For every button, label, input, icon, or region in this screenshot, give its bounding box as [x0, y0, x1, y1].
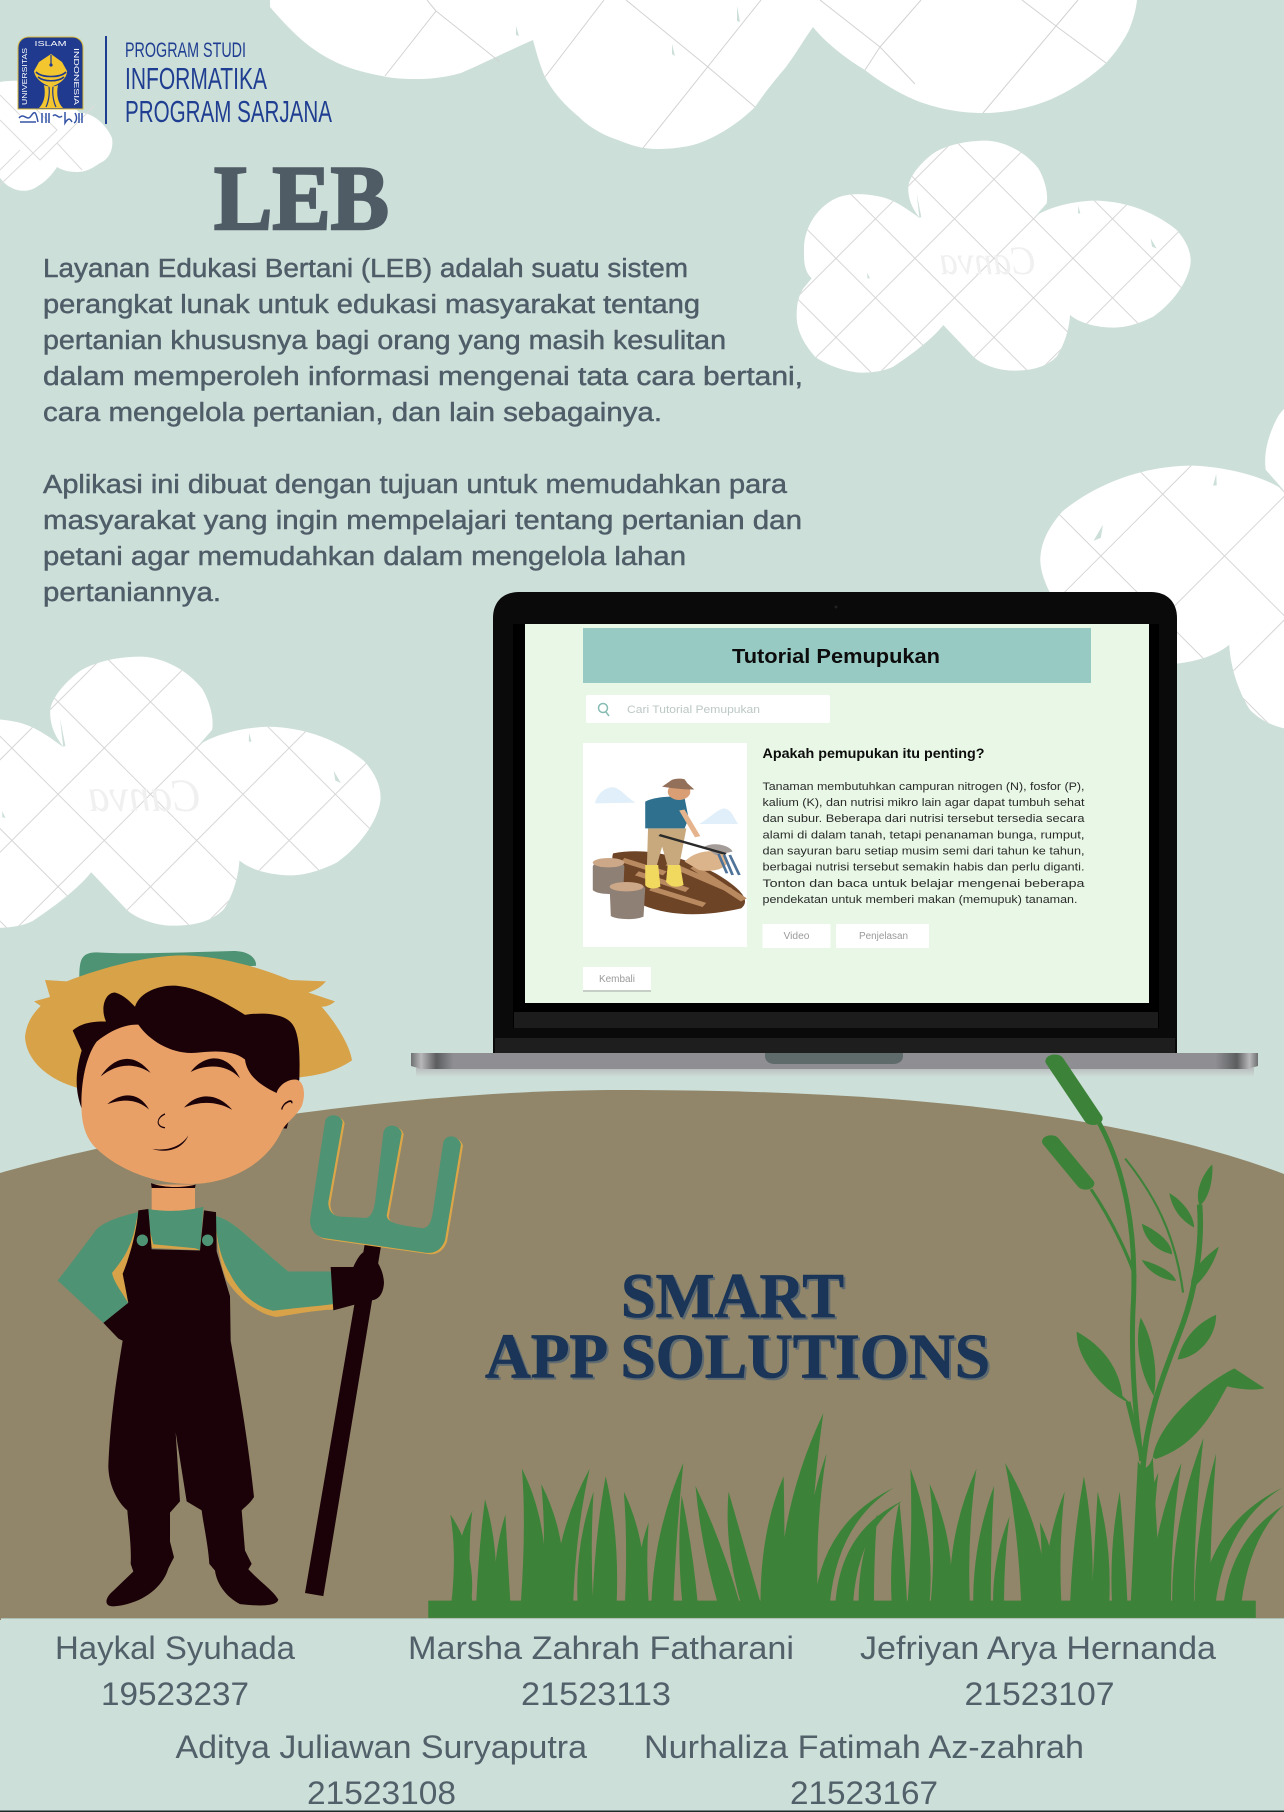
- description paragraph 2: pertaniannya.: [43, 579, 221, 607]
- logo text: PROGRAM SARJANA: [125, 94, 332, 129]
- grass: [428, 1413, 1284, 1618]
- article text: dan subur. Beberapa dari nutrisi tersebut tersedia secara: [762, 813, 1086, 825]
- screen: [525, 624, 1149, 1003]
- search box: [586, 695, 830, 723]
- watermark: Canva: [939, 238, 1036, 283]
- article text: pendekatan untuk memberi makan (memupuk) tanaman.: [762, 894, 1078, 906]
- laptop body: [493, 592, 1177, 1053]
- logo text: INFORMATIKA: [125, 61, 267, 96]
- icon: shield: [18, 37, 83, 109]
- search box: Cari Tutorial Pemupukan: [627, 704, 760, 716]
- icon: shield: INDONESIA: [72, 48, 79, 105]
- ground hill: [0, 1090, 1284, 1620]
- member: Haykal Syuhada: Haykal Syuhada: [55, 1630, 296, 1666]
- button: video: Video: [784, 931, 810, 942]
- description paragraph 1: dalam memperoleh informasi mengenai tata cara bertani,: [43, 363, 803, 391]
- member: Jefriyan Arya Hernanda: [860, 1630, 1217, 1712]
- neck shadow: [151, 1183, 196, 1188]
- description paragraph 2: petani agar memudahkan dalam mengelola lahan: [43, 543, 686, 571]
- glove: [331, 1251, 384, 1310]
- laptop base: [411, 1053, 1258, 1069]
- icon: shield: ISLAM: [34, 41, 67, 48]
- laptop base shadow: [416, 1068, 1254, 1077]
- button: kembali: Kembali: [599, 974, 635, 985]
- description paragraph 1: [43, 255, 803, 427]
- neck: [152, 1184, 195, 1213]
- laptop: [411, 592, 1258, 1077]
- member: Nurhaliza Fatimah Az-zahrah: Nurhaliza Fatimah Az-zahrah: [644, 1729, 1084, 1765]
- button: penjelasan: Penjelasan: [859, 931, 908, 942]
- face: [81, 1025, 304, 1184]
- divider: [105, 36, 107, 124]
- app header: [583, 628, 1091, 683]
- university logo: [18, 36, 332, 129]
- smart app solutions heading: APP SOLUTIONS: [485, 1320, 990, 1392]
- member: Marsha Zahrah Fatharani: Marsha Zahrah Fatharani: [408, 1630, 794, 1666]
- article text: berbagai nutrisi tersebut semakin habis dan perlu diganti.: [762, 862, 1084, 874]
- member: Haykal Syuhada: [55, 1630, 296, 1712]
- description paragraph 1: cara mengelola pertanian, dan lain sebagainya.: [43, 399, 662, 427]
- article text: [762, 781, 1086, 906]
- smart app solutions heading: SMART: [621, 1260, 844, 1331]
- article text: dan sayuran baru setiap musim semi dari tahun ke tahun,: [762, 846, 1084, 858]
- button: penjelasan: [836, 924, 929, 948]
- icon: calligraphy strip: [19, 112, 82, 123]
- member: Aditya Juliawan Suryaputra: Aditya Juliawan Suryaputra: [176, 1729, 588, 1765]
- smart app solutions heading: [485, 1260, 990, 1392]
- article text: Tonton dan baca untuk belajar mengenai beberapa: [762, 878, 1086, 890]
- member: Marsha Zahrah Fatharani: 21523113: [521, 1676, 671, 1712]
- member: Haykal Syuhada: 19523237: [101, 1676, 249, 1712]
- button: kembali: [583, 967, 651, 992]
- pitchfork: [305, 1115, 463, 1596]
- plant and grass: [428, 1061, 1284, 1618]
- title: LEB: LEB: [214, 147, 389, 249]
- description paragraph 1: Layanan Edukasi Bertani (LEB) adalah suatu sistem: [43, 255, 688, 283]
- team names band: [0, 1618, 1284, 1812]
- member: Marsha Zahrah Fatharani: [408, 1630, 794, 1712]
- icon: reed plant: [1051, 1061, 1265, 1603]
- description paragraph 2: masyarakat yang ingin mempelajari tentang pertanian dan: [43, 507, 802, 535]
- facial features: [101, 1058, 292, 1151]
- description paragraph 2: [43, 471, 802, 607]
- member: Nurhaliza Fatimah Az-zahrah: 21523167: [790, 1775, 938, 1811]
- article text: alami di dalam tanah, tetapi penanaman bunga, rumput,: [762, 830, 1084, 842]
- description paragraph 1: perangkat lunak untuk edukasi masyarakat tentang: [43, 291, 700, 319]
- member: Aditya Juliawan Suryaputra: [176, 1729, 588, 1811]
- description paragraph 1: pertanian khususnya bagi orang yang masih kesulitan: [43, 327, 726, 355]
- cloud: upper right: [747, 0, 1247, 901]
- overall buttons: [137, 1234, 213, 1246]
- watermark: Canva: [88, 770, 201, 822]
- icon: shield: UNIVERSITAS: [22, 48, 29, 105]
- logo text: [125, 39, 332, 129]
- hat brim: [25, 955, 352, 1088]
- shirt: [58, 1207, 333, 1323]
- farmer illustration panel: [583, 743, 747, 947]
- hair: [73, 986, 300, 1129]
- article text: Tanaman membutuhkan campuran nitrogen (N), fosfor (P),: [762, 781, 1084, 793]
- logo text: PROGRAM STUDI: [125, 39, 246, 62]
- button: video: [762, 924, 830, 948]
- farmer character: [25, 951, 463, 1606]
- description paragraph 2: Aplikasi ini dibuat dengan tujuan untuk memudahkan para: [43, 471, 788, 499]
- farmer illustration: [593, 779, 745, 919]
- article text: kalium (K), dan nutrisi mikro lain agar dapat tumbuh sehat: [762, 797, 1084, 809]
- member: Jefriyan Arya Hernanda: 21523107: [964, 1676, 1114, 1712]
- hat crown: [79, 951, 256, 982]
- member: Aditya Juliawan Suryaputra: 21523108: [307, 1775, 456, 1811]
- cloud: top left: [0, 81, 112, 191]
- cloud: right edge: [953, 0, 1284, 1562]
- member: Nurhaliza Fatimah Az-zahrah: [644, 1729, 1084, 1811]
- overalls: [103, 1209, 278, 1606]
- app header: Tutorial Pemupukan: [732, 645, 940, 668]
- webcam: [834, 606, 838, 608]
- article heading: Apakah pemupukan itu penting?: [762, 745, 984, 761]
- cloud: top centre: [270, 0, 1137, 149]
- member: Jefriyan Arya Hernanda: Jefriyan Arya Hernanda: [860, 1630, 1217, 1666]
